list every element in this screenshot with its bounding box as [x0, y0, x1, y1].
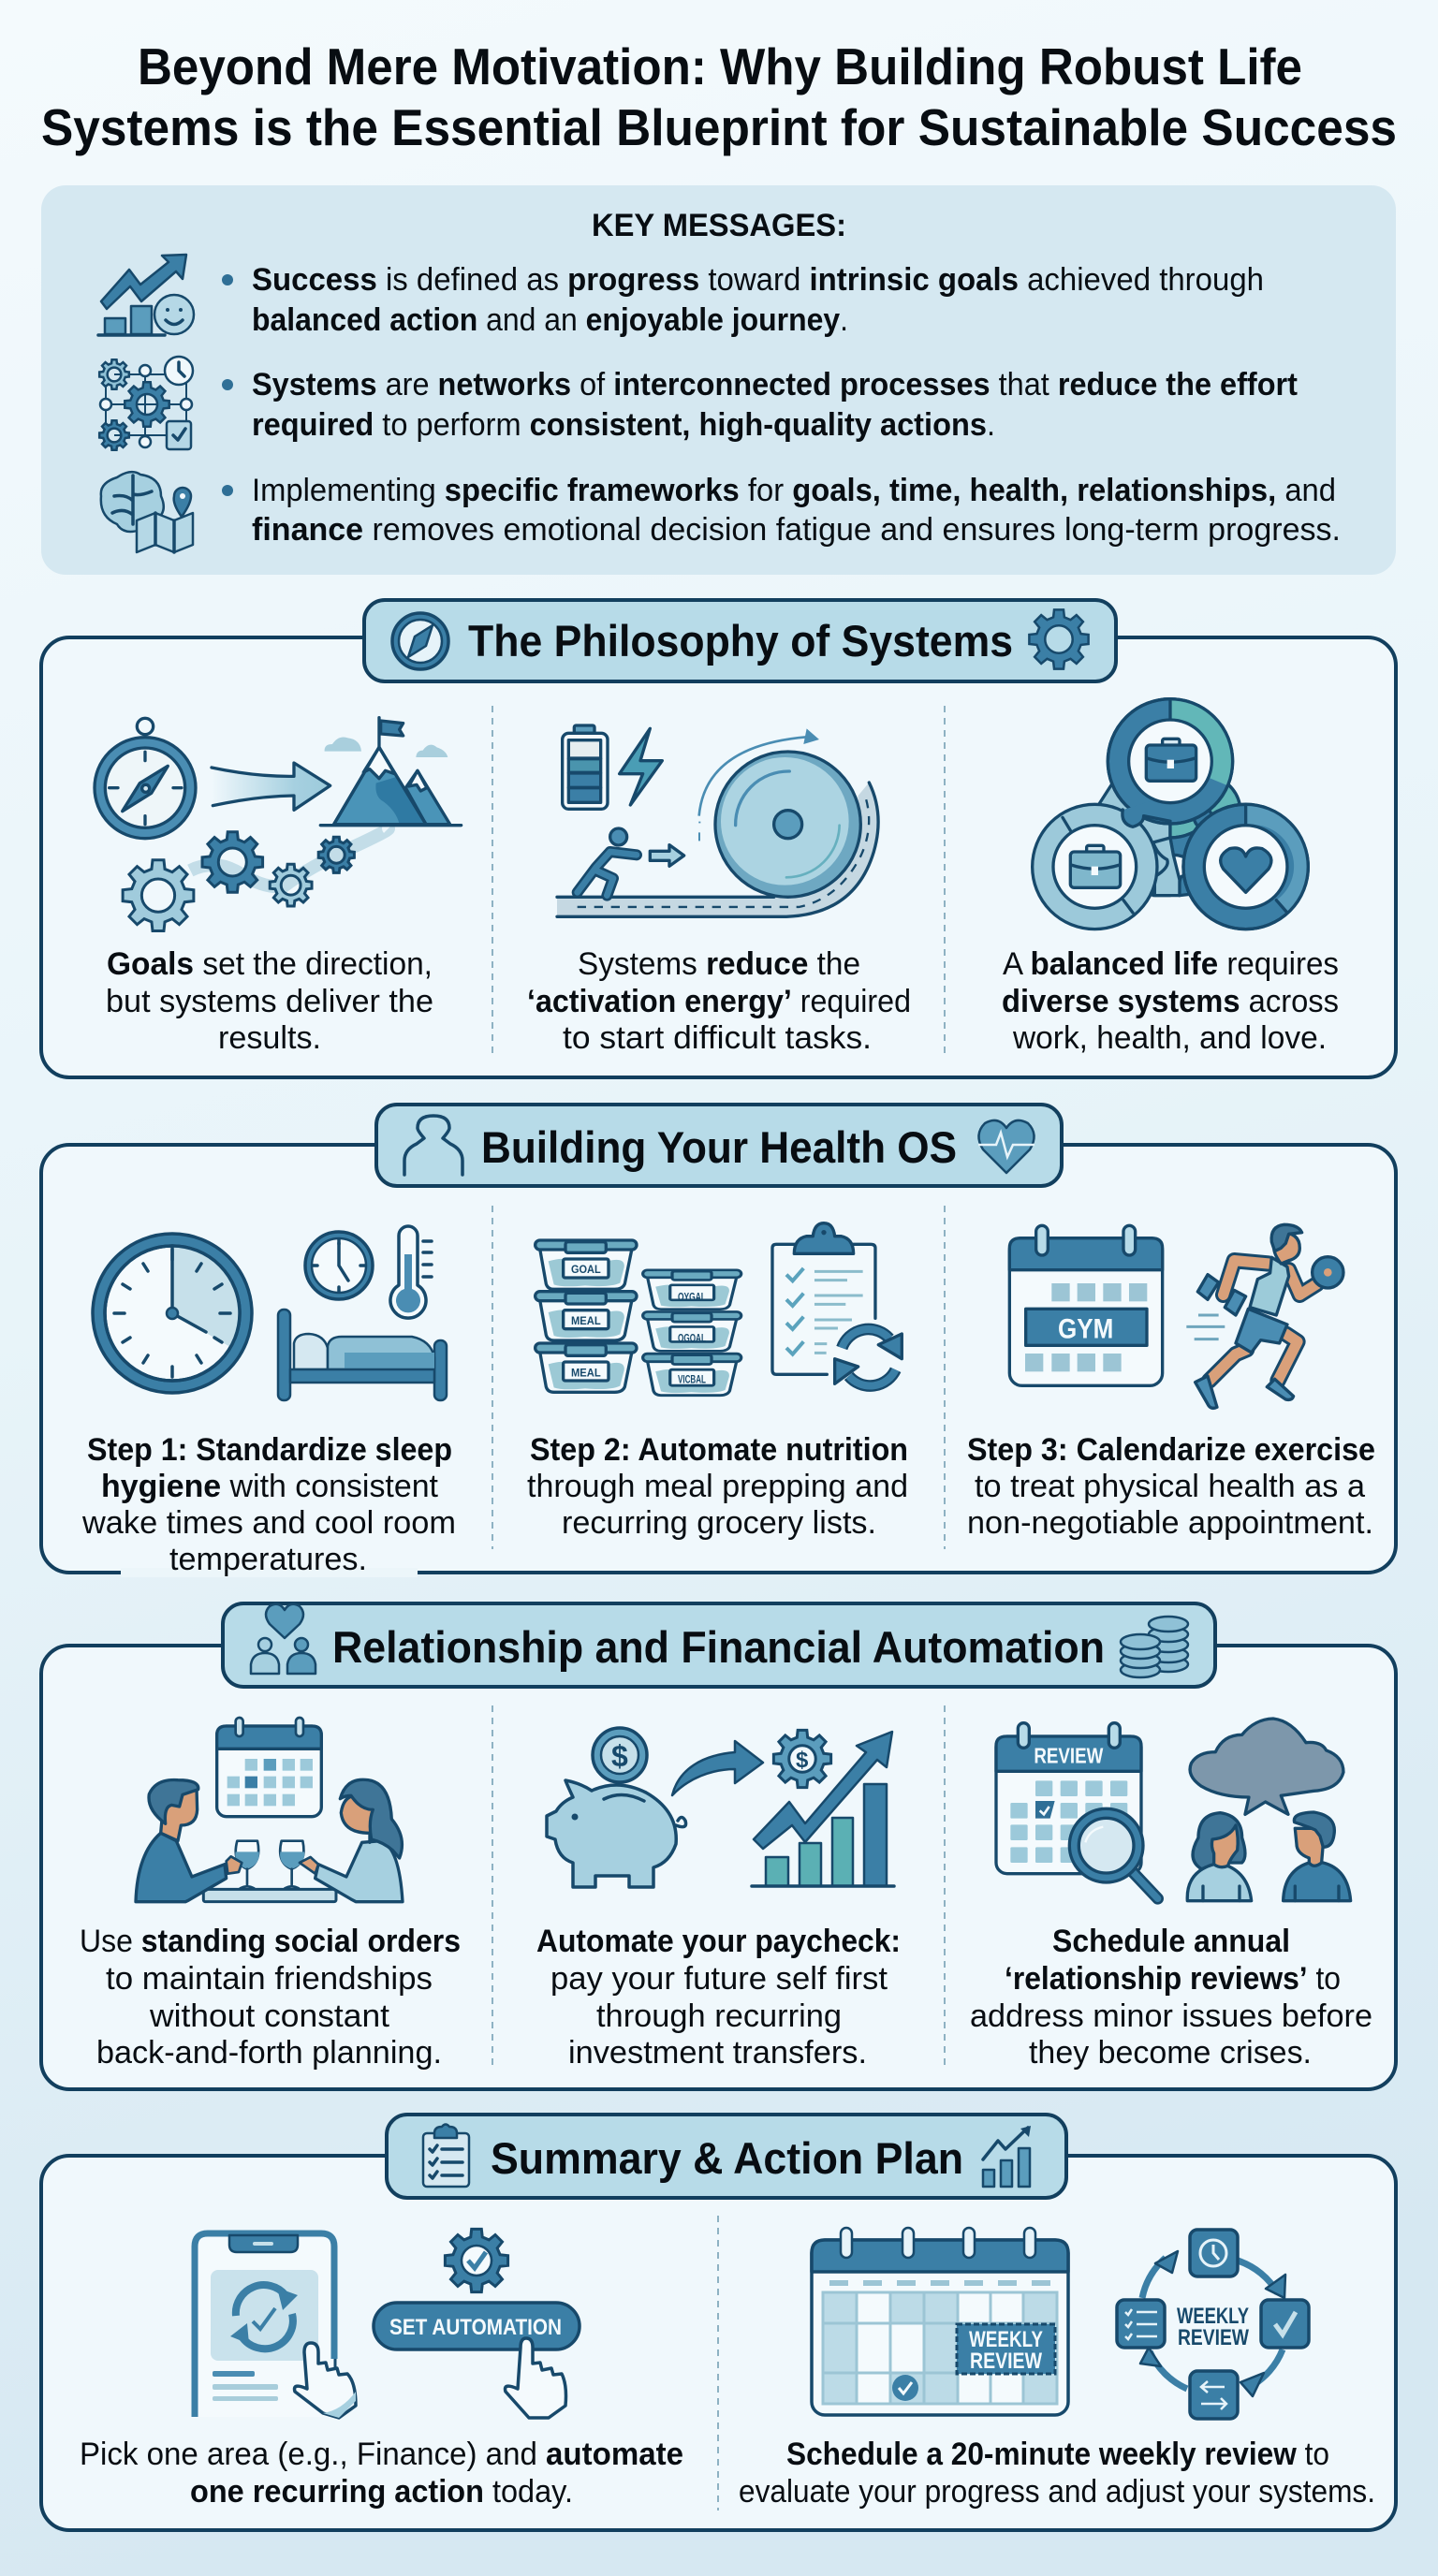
illustration: meal prep containers and grocery list: VICBAL: [678, 1373, 706, 1386]
text: activation energy: ‘activation energy’ required: [527, 984, 911, 1019]
illustration: weekly review calendar and cycle: REVIEW: [1178, 2325, 1249, 2350]
icon: growth chart with smile: [98, 255, 194, 335]
text: step 3: Step 3: Calendarize exercise: [967, 1432, 1375, 1468]
text: pick one area: one recurring action today.: [190, 2474, 573, 2510]
illustration: weekly review calendar and cycle: REVIEW: [970, 2349, 1042, 2374]
title: Beyond Mere Motivation: Why Building Robust Life: [138, 37, 1302, 95]
text: standing social orders: [80, 1924, 461, 2071]
heading: building your health os: [376, 1105, 1062, 1186]
heading: summary and action plan: [387, 2115, 1066, 2198]
illustration: phone with automation button: SET AUTOMATION: [389, 2315, 562, 2340]
text: standing social orders: Use standing social orders: [80, 1924, 461, 1959]
illustration: gym calendar and runner: [1009, 1224, 1343, 1408]
icon: system network: [99, 357, 193, 450]
title: [41, 37, 1397, 156]
illustration: phone with automation button: [194, 2229, 580, 2418]
text: schedule weekly review: [739, 2437, 1375, 2510]
illustration: meal prep containers and grocery list: OGOAL: [678, 1331, 706, 1344]
text: message 3: Implementing specific frameworks for goals, time, health, relationships, and: [252, 473, 1336, 508]
divider line: [717, 2216, 719, 2510]
panel: relationship and financial automation: [41, 1603, 1396, 2089]
heading: key messages: KEY MESSAGES:: [592, 208, 846, 243]
text: step 1: Step 1: Standardize sleep: [87, 1432, 452, 1468]
text: relationship reviews: Schedule annual: [1052, 1924, 1290, 1959]
text: relationship reviews: ‘relationship reviews’ to: [1005, 1961, 1341, 1997]
text: step 1: wake times and cool room: [81, 1505, 456, 1541]
text: balanced life: A balanced life requires: [1003, 946, 1339, 982]
illustration: piggy bank to growth chart: [547, 1728, 894, 1887]
panel: key messages: [41, 185, 1396, 575]
panel: building your health os: [41, 1105, 1396, 1577]
text: goals: results.: [218, 1020, 321, 1056]
text: balanced life: work, health, and love.: [1012, 1020, 1327, 1056]
illustration: review calendar, magnifier, couple with cloud: REVIEW: [1034, 1743, 1104, 1767]
heading: building your health os: Building Your Health OS: [481, 1122, 957, 1172]
heading: the philosophy of systems: The Philosophy of Systems: [468, 616, 1013, 666]
text: activation energy: to start difficult tasks.: [563, 1020, 872, 1056]
text: goals: [106, 946, 433, 1056]
text: message 1: [252, 262, 1264, 338]
text: step 1: [81, 1432, 456, 1577]
text: step 2: through meal prepping and: [527, 1469, 908, 1504]
text: message 2: Systems are networks of interconnected processes that reduce the effort: [252, 367, 1298, 402]
text: schedule weekly review: evaluate your progress and adjust your systems.: [739, 2474, 1375, 2510]
illustration: weekly review calendar and cycle: WEEKLY: [969, 2327, 1043, 2352]
bullet: [222, 379, 233, 390]
text: step 3: [967, 1432, 1375, 1541]
panel: the philosophy of systems: [41, 600, 1396, 1077]
text: step 1: temperatures.: [169, 1542, 367, 1577]
divider lines: [492, 706, 945, 1053]
text: balanced life: diverse systems across: [1002, 984, 1339, 1019]
text: step 2: recurring grocery lists.: [562, 1505, 876, 1541]
illustration: clock, thermometer, bed: [93, 1226, 447, 1400]
text: automate your paycheck: investment transfers.: [568, 2035, 867, 2071]
text: standing social orders: back-and-forth planning.: [96, 2035, 442, 2071]
illustration: meal prep containers and grocery list: MEAL: [571, 1314, 601, 1327]
text: automate your paycheck: Automate your paycheck:: [536, 1924, 901, 1959]
heading: summary and action plan: Summary & Action Plan: [491, 2133, 963, 2183]
heading: relationship and financial automation: [223, 1603, 1215, 1687]
text: relationship reviews: [970, 1924, 1372, 2071]
text: message 2: required to perform consistent, high-quality actions.: [252, 407, 995, 443]
text: balanced life: [1002, 946, 1339, 1056]
bullet: [222, 485, 233, 496]
text: message 3: finance removes emotional decision fatigue and ensures long-term progress.: [252, 512, 1341, 548]
text: pick one area: [80, 2437, 683, 2510]
illustration: weekly review calendar and cycle: [812, 2228, 1309, 2419]
illustration: weekly review calendar and cycle: WEEKLY: [1177, 2304, 1249, 2329]
text: goals: but systems deliver the: [106, 984, 433, 1019]
text: standing social orders: without constant: [149, 1998, 390, 2034]
illustration: meal prep containers and grocery list: OYGAL: [678, 1290, 706, 1303]
text: automate your paycheck: pay your future self first: [550, 1961, 888, 1997]
illustration: couple with calendar and wine: [136, 1718, 403, 1902]
text: automate your paycheck: through recurring: [596, 1998, 842, 2034]
heading: the philosophy of systems: [364, 600, 1116, 681]
bullet: [222, 274, 233, 285]
illustration: piggy bank to growth chart: $: [611, 1739, 628, 1773]
text: relationship reviews: they become crises.: [1029, 2035, 1312, 2071]
text: standing social orders: to maintain friendships: [106, 1961, 433, 1997]
illustration: gym calendar and runner: GYM: [1058, 1313, 1113, 1344]
divider lines: [492, 1206, 945, 1549]
panel: summary and action plan: [41, 2115, 1396, 2530]
text: schedule weekly review: Schedule a 20-minute weekly review to: [786, 2437, 1329, 2472]
text: automate your paycheck: [536, 1924, 901, 2071]
text: pick one area: Pick one area (e.g., Finance) and automate: [80, 2437, 683, 2472]
illustration: battery, person pushing flywheel: [557, 725, 878, 916]
illustration: balanced life puzzle rings: [1033, 699, 1308, 929]
divider lines: [492, 1705, 945, 2069]
illustration: compass to mountain with gears: [95, 718, 462, 931]
text: step 1: hygiene with consistent: [101, 1469, 439, 1504]
illustration: review calendar, magnifier, couple with cloud: [996, 1719, 1351, 1901]
text: message 1: Success is defined as progress toward intrinsic goals achieved through: [252, 262, 1264, 298]
text: message 2: [252, 367, 1298, 443]
heading: relationship and financial automation: Relationship and Financial Automation: [332, 1622, 1105, 1672]
illustration: piggy bank to growth chart: $: [796, 1748, 809, 1773]
text: relationship reviews: address minor issues before: [970, 1998, 1372, 2034]
text: message 3: [252, 473, 1341, 548]
text: step 3: non-negotiable appointment.: [967, 1505, 1373, 1541]
illustration: meal prep containers and grocery list: GOAL: [571, 1263, 601, 1276]
illustration: meal prep containers and grocery list: [536, 1223, 902, 1396]
icon: brain and map: [101, 472, 193, 552]
text: activation energy: Systems reduce the: [578, 946, 860, 982]
text: goals: Goals set the direction,: [107, 946, 433, 982]
illustration: meal prep containers and grocery list: MEAL: [571, 1367, 601, 1380]
text: step 3: to treat physical health as a: [975, 1469, 1365, 1504]
text: step 2: Step 2: Automate nutrition: [530, 1432, 908, 1468]
text: message 1: balanced action and an enjoyable journey.: [252, 302, 848, 338]
text: activation energy: [527, 946, 911, 1056]
text: step 2: [527, 1432, 908, 1541]
